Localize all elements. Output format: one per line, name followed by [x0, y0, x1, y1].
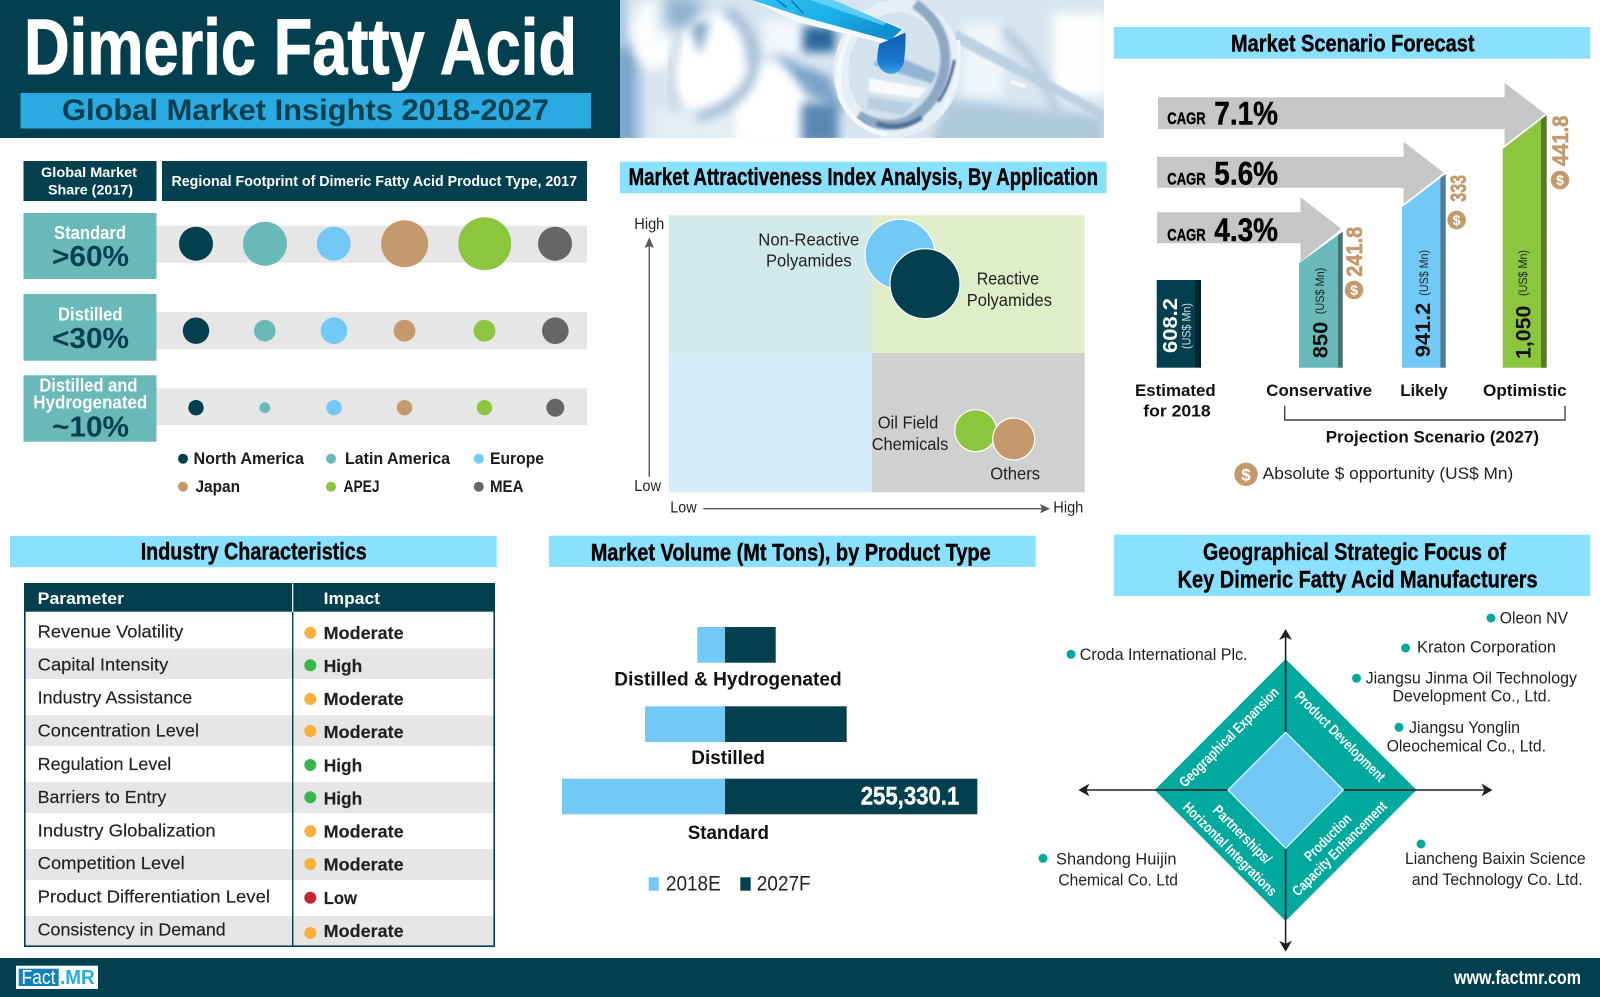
- arrow: CAGR 5.6%: CAGR: [1167, 170, 1206, 188]
- legend: absolute opportunity: $: [1241, 466, 1251, 484]
- row: capital intensity: Capital Intensity: [38, 655, 169, 675]
- bubble: oil field chemicals: Oil Field: [878, 412, 938, 432]
- logo: Fact.MR: [16, 966, 98, 989]
- row: product differentiation level: [38, 886, 357, 908]
- legend: years: [649, 872, 811, 896]
- bubble: non-reactive polyamides: Non-Reactive: [758, 229, 859, 249]
- table header: Impact: [324, 589, 380, 608]
- heading: attractiveness: [620, 162, 1107, 193]
- legend: regions: Europe: [490, 449, 544, 468]
- bar: likely: [1400, 174, 1471, 400]
- panel: geographical strategic focus: [1038, 535, 1590, 952]
- bar: estimated 2018: [1135, 280, 1216, 421]
- axes: [1078, 629, 1492, 952]
- panel: market scenario forecast: [1114, 27, 1590, 486]
- arrow: CAGR 7.1%: [1158, 83, 1545, 145]
- row: barriers to entry: Barriers to Entry: [38, 787, 167, 807]
- row: industry assistance: [38, 688, 404, 709]
- heading: industry characteristics: Industry Characteristics: [141, 538, 367, 565]
- company: kraton: Kraton Corporation: [1417, 639, 1556, 657]
- inner diamond: [1228, 732, 1343, 848]
- legend: absolute opportunity: Absolute $ opportunity (US$ Mn): [1263, 464, 1513, 483]
- bar: likely: 333: [1446, 175, 1471, 202]
- glass dish: [834, 0, 961, 138]
- bubble: reactive polyamides: [890, 249, 1052, 319]
- legend: regions: North America: [194, 449, 305, 468]
- pipette tip: [752, 0, 903, 45]
- legend: regions: Latin America: [345, 449, 451, 468]
- row: regulation level: [38, 754, 362, 776]
- company: jiangsu jinma: Jiangsu Jinma Oil Technology: [1366, 669, 1578, 687]
- heading: scenario forecast: [1114, 27, 1590, 59]
- bar: optimistic: 441.8: [1548, 116, 1573, 166]
- company: shandong huijin: [1038, 850, 1178, 890]
- legend: regions: APEJ: [344, 477, 380, 496]
- heading: geographical focus: Geographical Strategic Focus of: [1203, 539, 1507, 566]
- icon: dollar: [1345, 281, 1363, 299]
- company: jiangsu yonglin: Jiangsu Yonglin: [1409, 719, 1520, 737]
- company: shandong huijin: Shandong Huijin: [1056, 850, 1176, 868]
- x axis: [670, 500, 1083, 517]
- arrow: CAGR 5.6%: [1157, 142, 1444, 204]
- bar: conservative: [1266, 227, 1372, 400]
- company: liancheng baixin: [1405, 840, 1586, 889]
- quadrant labels: Geographical Expansion: [1177, 685, 1283, 791]
- icon: dollar: [1551, 171, 1569, 189]
- bar: distilled and hydrogenated: Distilled & Hydrogenated: [614, 669, 842, 690]
- arrow: CAGR 4.3%: [1157, 197, 1341, 262]
- row: distilled and hydrogenated: [24, 375, 587, 444]
- subtitle bar: Global Market Insights 2018-2027: [62, 94, 549, 127]
- company: liancheng baixin: and Technology Co. Ltd.: [1412, 871, 1583, 889]
- bubble: reactive polyamides: Reactive: [977, 269, 1039, 289]
- row: industry assistance: Moderate: [324, 689, 404, 709]
- bar: distilled: Distilled: [691, 748, 765, 769]
- website: www.factmr.com: [1453, 968, 1581, 989]
- bubble: non-reactive polyamides: Polyamides: [766, 251, 852, 271]
- projection scenario bracket: Projection Scenario (2027): [1326, 427, 1539, 446]
- company: shandong huijin: Chemical Co. Ltd: [1058, 872, 1178, 890]
- bar: standard: [562, 779, 977, 844]
- y axis: High: [634, 216, 664, 233]
- row: distilled: Distilled: [58, 304, 122, 324]
- bubble: oil field chemicals: Chemicals: [872, 434, 949, 454]
- header photo: pipette and glass dish: [620, 0, 1104, 138]
- bubble: oil field chemicals: [872, 410, 997, 454]
- company: jiangsu yonglin: [1387, 719, 1546, 756]
- x axis: Low: [670, 500, 697, 517]
- company: jiangsu yonglin: Oleochemical Co., Ltd.: [1387, 738, 1546, 756]
- legend: regions: [178, 449, 544, 496]
- arrow: CAGR 4.3%: 4.3%: [1214, 212, 1278, 248]
- bar: conservative: (US$ Mn): [1315, 268, 1327, 314]
- logo: Fact.MR: .MR: [60, 967, 95, 989]
- row: regulation level: Regulation Level: [38, 754, 171, 774]
- row: barriers to entry: [38, 787, 362, 808]
- row: distilled: [24, 294, 587, 361]
- bar: standard: 255,330.1: [861, 783, 959, 811]
- row: capital intensity: [38, 655, 362, 676]
- panel: regional footprint: [24, 161, 587, 496]
- row: product differentiation level: Low: [324, 888, 357, 908]
- legend: years: 2018E: [666, 872, 721, 896]
- arrow: CAGR 7.1%: CAGR: [1167, 110, 1206, 128]
- heading: scenario forecast: Market Scenario Forecast: [1231, 31, 1475, 58]
- bar: estimated 2018: Estimated: [1135, 381, 1216, 400]
- bar: distilled and hydrogenated: [614, 627, 842, 690]
- company: liancheng baixin: Liancheng Baixin Science: [1405, 850, 1586, 868]
- bar: optimistic: (US$ Mn): [1518, 250, 1530, 296]
- company: jiangsu jinma: Development Co., Ltd.: [1392, 688, 1551, 706]
- row: standard: [24, 213, 587, 279]
- row: revenue volatility: Moderate: [324, 623, 404, 643]
- company: croda: Croda International Plc.: [1080, 646, 1248, 664]
- row: industry globalization: Industry Globalization: [38, 820, 216, 840]
- panel: market attractiveness: [620, 162, 1107, 517]
- row: industry assistance: Industry Assistance: [38, 688, 192, 708]
- bar: likely: Likely: [1400, 381, 1448, 400]
- row: consistency in demand: Consistency in Demand: [38, 919, 226, 939]
- row: distilled and hydrogenated: Distilled and: [39, 375, 137, 395]
- row: industry globalization: [38, 820, 404, 842]
- heading: attractiveness: Market Attractiveness Index Analysis, By Application: [629, 164, 1098, 191]
- icon: dollar: $: [1453, 212, 1461, 228]
- strategy diamond: [1078, 629, 1492, 952]
- row: standard: Standard: [54, 223, 126, 243]
- title: Dimeric Fatty Acid: [24, 2, 577, 91]
- company: oleon: Oleon NV: [1500, 609, 1568, 627]
- row: standard: >60%: [52, 241, 129, 273]
- legend: regions: Japan: [196, 477, 240, 496]
- bar: likely: (US$ Mn): [1419, 250, 1431, 296]
- row: competition level: [38, 853, 404, 874]
- bar: conservative: 850: [1309, 322, 1332, 358]
- bar: estimated 2018: (US$ Mn): [1182, 303, 1194, 349]
- panel: industry characteristics: [10, 536, 497, 946]
- row: distilled and hydrogenated: ~10%: [52, 412, 129, 444]
- row: capital intensity: High: [324, 656, 362, 676]
- heading: global market share: Global Market: [41, 164, 137, 180]
- heading: geographical focus: Key Dimeric Fatty Acid Manufacturers: [1178, 567, 1538, 594]
- bubble: non-reactive polyamides: [758, 219, 935, 289]
- icon: dollar: [1447, 211, 1466, 229]
- heading: industry characteristics: [10, 536, 497, 567]
- row: regulation level: High: [324, 756, 362, 776]
- quadrant labels: Capacity Enhancement: [1290, 799, 1391, 900]
- heading: global market share: [24, 161, 156, 201]
- bar: optimistic: [1483, 115, 1573, 400]
- table: [24, 583, 495, 946]
- icon: dollar: $: [1556, 172, 1564, 188]
- bar: estimated 2018: for 2018: [1143, 402, 1211, 421]
- row: concentration level: Moderate: [324, 722, 404, 742]
- blue drop: [877, 33, 905, 74]
- heading: global market share: Share (2017): [48, 182, 133, 198]
- x axis: High: [1053, 500, 1083, 517]
- legend: regions: MEA: [490, 477, 524, 496]
- heading: regional footprint: Regional Footprint of Dimeric Fatty Acid Product Type, 2017: [172, 173, 577, 190]
- row: competition level: Moderate: [324, 854, 404, 874]
- arrow: CAGR 5.6%: 5.6%: [1214, 156, 1278, 192]
- bar: optimistic: Optimistic: [1483, 381, 1567, 400]
- row: distilled and hydrogenated: Hydrogenated: [33, 393, 147, 413]
- bar: distilled: [645, 706, 847, 769]
- quadrant labels: Product Development: [1291, 689, 1388, 785]
- quadrant labels: Partnerships/: [1209, 803, 1274, 868]
- quadrant labels: Production: [1302, 811, 1355, 865]
- row: competition level: Competition Level: [38, 853, 185, 873]
- row: consistency in demand: [38, 919, 404, 941]
- header banner: [0, 0, 620, 138]
- bubble: reactive polyamides: Polyamides: [967, 290, 1052, 310]
- row: industry globalization: Moderate: [324, 822, 404, 842]
- table header: Parameter: [38, 589, 124, 608]
- bubble: others: [990, 418, 1040, 483]
- legend: years: 2027F: [757, 872, 811, 896]
- row: concentration level: [38, 721, 404, 742]
- arrow: CAGR 7.1%: 7.1%: [1214, 96, 1278, 132]
- matrix quadrants: [669, 215, 1085, 492]
- heading: market volume: Market Volume (Mt Tons), by Product Type: [591, 540, 991, 567]
- projection scenario bracket: [1285, 406, 1565, 446]
- bar: likely: 941.2: [1412, 303, 1435, 357]
- quadrant labels: Horizontal Integrations: [1179, 800, 1280, 900]
- bar: conservative: 241.8: [1342, 227, 1367, 277]
- arrow: CAGR 4.3%: CAGR: [1167, 227, 1206, 245]
- panel: market volume: [549, 536, 1036, 896]
- bubble: others: Others: [990, 463, 1040, 483]
- heading: regional footprint: [162, 161, 587, 201]
- quadrant labels: [1177, 685, 1391, 900]
- bar: conservative: Conservative: [1266, 381, 1372, 400]
- footer: [0, 958, 1600, 997]
- icon: dollar: $: [1350, 282, 1358, 298]
- row: revenue volatility: Revenue Volatility: [38, 621, 184, 641]
- table header: [24, 583, 495, 612]
- y axis: Low: [634, 478, 662, 495]
- company: jiangsu jinma: [1352, 669, 1578, 706]
- bar: standard: Standard: [688, 823, 769, 844]
- row: distilled: <30%: [52, 323, 129, 355]
- y axis: [634, 216, 664, 495]
- row: product differentiation level: Product Differentiation Level: [38, 886, 270, 906]
- bar: optimistic: 1,050: [1513, 306, 1536, 359]
- row: barriers to entry: High: [324, 788, 362, 808]
- row: concentration level: Concentration Level: [38, 721, 199, 741]
- heading: geographical focus: [1114, 535, 1590, 596]
- row: revenue volatility: [38, 621, 404, 643]
- logo: Fact.MR: Fact: [22, 967, 56, 989]
- row: consistency in demand: Moderate: [324, 921, 404, 941]
- bar: estimated 2018: 608.2: [1160, 298, 1182, 353]
